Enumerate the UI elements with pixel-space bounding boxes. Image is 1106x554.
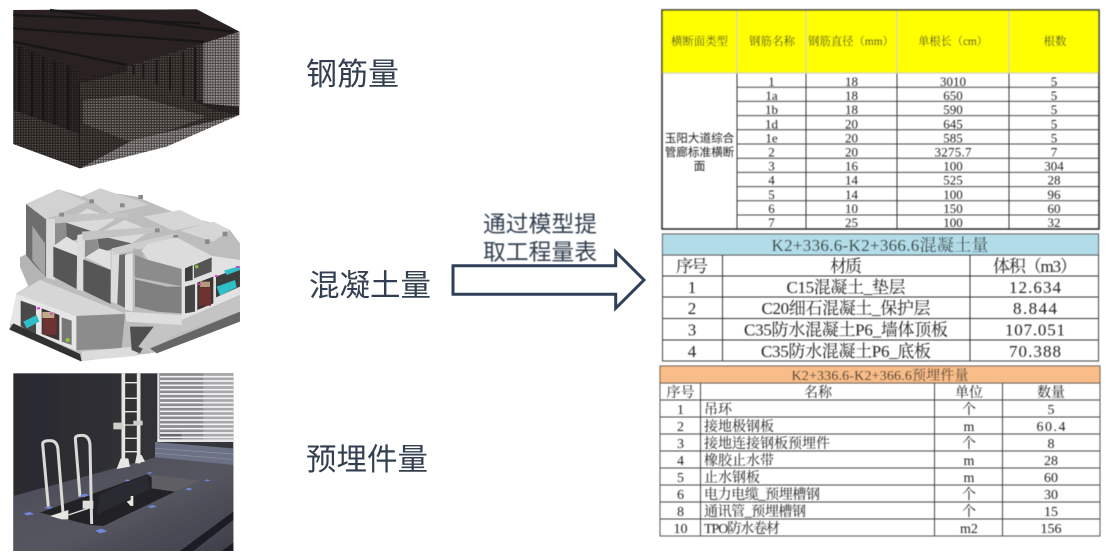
data rows: 20 <box>845 130 858 145</box>
embedded table rows: 8 <box>677 505 684 520</box>
embedded table rows: 1 <box>677 403 684 418</box>
data rows: 1e <box>765 130 778 145</box>
embedded table rows: m <box>964 420 975 435</box>
concrete table rows: 8.844 <box>1013 299 1058 318</box>
data rows: 60 <box>1048 201 1060 216</box>
embedded table rows: 3 <box>677 437 684 452</box>
concrete table rows <box>676 257 1077 361</box>
data rows: 585 <box>943 130 963 145</box>
embedded table rows: 接地连接钢板预埋件 <box>704 435 830 452</box>
concrete table rows: 材质 <box>830 257 862 276</box>
arrow caption <box>483 211 597 265</box>
embedded table rows: m2 <box>960 522 978 537</box>
embedded table rows: 156 <box>1040 522 1062 537</box>
arrow caption: 通过模型提 <box>483 211 597 237</box>
concrete table rows: 12.634 <box>1009 278 1062 297</box>
header row <box>671 34 1067 48</box>
embedded table title: K2+336.6-K2+366.6预埋件量 <box>792 368 968 384</box>
embedded table rows: 数量 <box>1037 384 1065 401</box>
data rows: 3275.7 <box>934 144 972 159</box>
data rows <box>765 74 1064 230</box>
data rows: 3010 <box>940 74 966 89</box>
data rows: 1b <box>765 102 778 117</box>
concrete table rows: 2 <box>688 299 696 318</box>
data rows: 7 <box>768 215 775 230</box>
embedded table rows: 30 <box>1044 488 1058 503</box>
embedded table rows: 吊环 <box>704 402 733 418</box>
concrete table rows: 107.051 <box>1005 320 1065 340</box>
data rows: 650 <box>943 88 963 103</box>
data rows: 7 <box>1051 144 1058 159</box>
data rows: 16 <box>845 159 858 174</box>
header row: 横断面类型 <box>671 34 728 48</box>
data rows: 150 <box>943 201 963 216</box>
data rows: 14 <box>845 173 858 188</box>
embedded table rows: 序号 <box>666 385 694 401</box>
data rows: 304 <box>1044 159 1064 174</box>
merged cross-section cell <box>665 131 735 173</box>
embedded table rows: 电力电缆_预埋槽钢 <box>704 486 820 503</box>
embedded table rows: 6 <box>677 488 684 503</box>
data rows: 6 <box>768 201 775 216</box>
data rows: 25 <box>845 215 858 230</box>
data rows: 5 <box>768 187 775 202</box>
data rows: 20 <box>845 116 858 131</box>
data rows: 20 <box>845 144 858 159</box>
concrete table rows: 4 <box>688 342 697 361</box>
concrete table rows: C15混凝土_垫层 <box>786 278 906 297</box>
data rows: 1 <box>768 74 775 89</box>
embedded table rows: 接地极钢板 <box>704 418 774 435</box>
data rows: 10 <box>845 201 858 216</box>
concrete table title: K2+336.6-K2+366.6混凝土量 <box>772 236 988 255</box>
embedded table rows: m <box>964 471 975 486</box>
concrete table rows: C20细石混凝土_保护层 <box>762 299 930 318</box>
concrete table rows: C35防水混凝土P6_底板 <box>761 342 931 361</box>
image: embedded parts photo with ladder and handrails <box>13 373 233 551</box>
embedded table rows <box>666 384 1066 537</box>
data rows: 100 <box>943 187 963 202</box>
data rows: 5 <box>1051 102 1057 117</box>
embedded table rows: 个 <box>962 504 976 520</box>
data rows: 5 <box>1051 88 1057 103</box>
data rows: 645 <box>943 116 963 131</box>
embedded table rows: 名称 <box>804 385 833 401</box>
table: embedded parts quantities <box>660 366 1100 537</box>
heading: concrete quantity: 混凝土量 <box>309 269 431 303</box>
data rows: 2 <box>768 144 775 159</box>
embedded table rows: 通讯管_预埋槽钢 <box>704 503 806 520</box>
embedded table rows: 单位 <box>955 385 983 401</box>
embedded table rows: 橡胶止水带 <box>704 452 774 469</box>
merged cross-section cell: 管廊标准横断 <box>665 145 735 159</box>
embedded table rows: 4 <box>677 454 684 469</box>
data rows: 32 <box>1048 215 1060 230</box>
arrow: pointing to quantity tables <box>453 252 644 308</box>
concrete table rows: C35防水混凝土P6_墙体顶板 <box>744 320 948 340</box>
concrete table rows: 体积（m3） <box>993 257 1077 276</box>
concrete table rows: 3 <box>688 320 696 340</box>
data rows: 5 <box>1051 116 1057 131</box>
embedded table rows: 8 <box>1048 437 1054 452</box>
embedded table rows: 5 <box>677 471 684 486</box>
data rows: 3 <box>768 159 775 174</box>
data rows: 18 <box>845 88 858 103</box>
heading: embedded parts quantity: 预埋件量 <box>306 443 428 477</box>
header row: 钢筋直径（mm） <box>808 34 894 48</box>
embedded table rows: 5 <box>1048 403 1054 418</box>
data rows: 5 <box>1051 74 1057 89</box>
image: rebar cage model <box>13 9 239 168</box>
concrete table rows: 1 <box>688 278 696 297</box>
data rows: 525 <box>943 173 963 188</box>
header row: 根数 <box>1044 34 1067 48</box>
data rows: 100 <box>943 215 963 230</box>
data rows: 1d <box>765 116 778 131</box>
data rows: 5 <box>1051 130 1057 145</box>
embedded table rows: m <box>964 454 975 469</box>
data rows: 96 <box>1048 187 1061 202</box>
header row: 单根长（cm） <box>918 34 988 48</box>
data rows: 18 <box>845 74 858 89</box>
data rows: 590 <box>943 102 963 117</box>
embedded table rows: 个 <box>962 436 976 452</box>
image: concrete utility tunnel model <box>9 188 240 362</box>
embedded table rows: 个 <box>962 487 976 503</box>
embedded table rows: 60.4 <box>1036 420 1066 435</box>
embedded table rows: 个 <box>962 402 976 418</box>
heading: rebar quantity: 钢筋量 <box>306 57 399 92</box>
merged cross-section cell: 玉阳大道综合 <box>665 131 735 145</box>
embedded table rows: 15 <box>1044 505 1058 520</box>
embedded table rows: 2 <box>677 420 684 435</box>
data rows: 4 <box>768 173 775 188</box>
data rows: 14 <box>845 187 858 202</box>
data rows: 28 <box>1048 173 1060 188</box>
arrow caption: 取工程量表 <box>483 239 597 265</box>
embedded table rows: TPO防水卷材 <box>704 520 780 537</box>
header row: 钢筋名称 <box>749 34 796 48</box>
data rows: 1a <box>765 88 778 103</box>
table: rebar quantities <box>662 10 1099 230</box>
table: concrete quantities <box>662 234 1098 361</box>
embedded table rows: 止水钢板 <box>704 469 760 486</box>
embedded table rows: 60 <box>1044 471 1058 486</box>
merged cross-section cell: 面 <box>694 160 705 173</box>
embedded table rows: 10 <box>674 522 688 537</box>
data rows: 100 <box>943 159 963 174</box>
embedded table rows: 28 <box>1044 454 1058 469</box>
concrete table rows: 70.388 <box>1009 342 1061 361</box>
concrete table rows: 序号 <box>676 257 708 276</box>
data rows: 18 <box>845 102 858 117</box>
